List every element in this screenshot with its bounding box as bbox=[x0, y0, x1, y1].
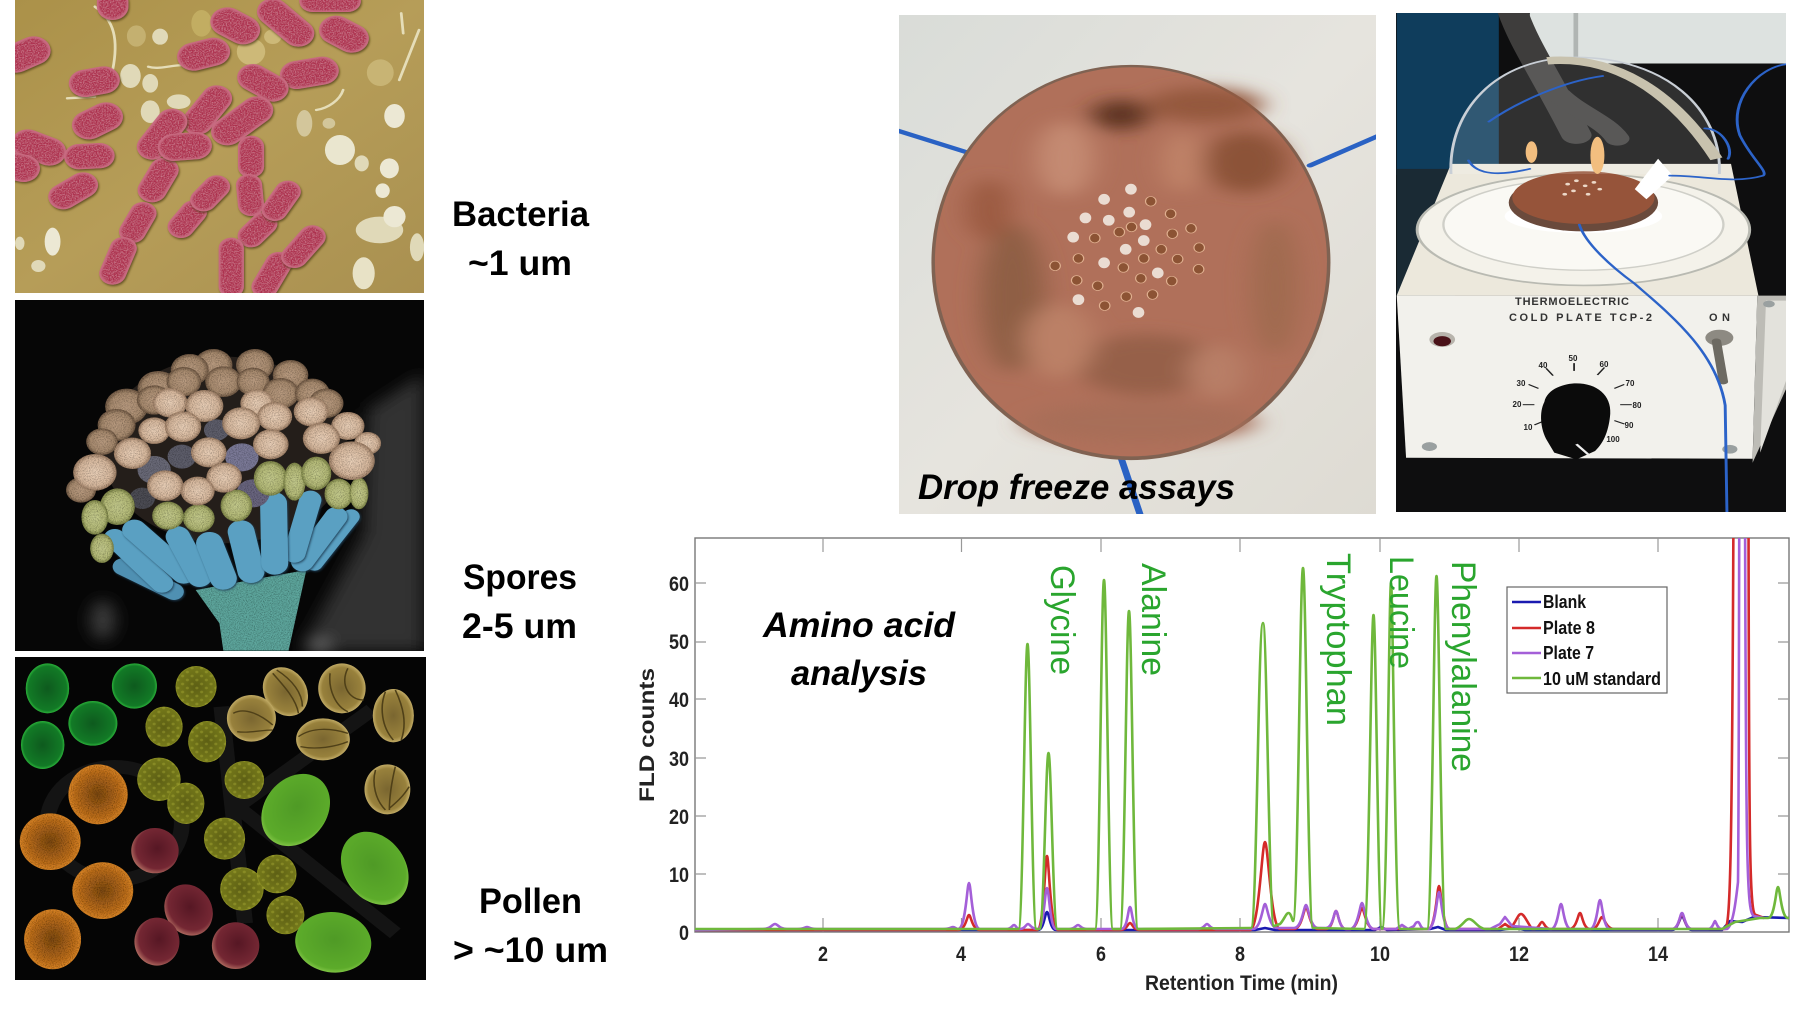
peak labels: Tryptophan bbox=[1319, 553, 1357, 726]
label: bacteria: ~1 um bbox=[468, 244, 572, 283]
panel: thermoelectric cold plate photo bbox=[1396, 10, 1792, 512]
dial knob bbox=[1541, 383, 1610, 459]
panel: pollen micrograph bbox=[15, 657, 426, 982]
panel lettering: THERMOELECTRIC bbox=[1515, 296, 1629, 308]
peak labels: Phenylalanine bbox=[1444, 561, 1482, 772]
x axis tick labels: 10 bbox=[1370, 943, 1390, 966]
label: spores: Spores bbox=[463, 558, 577, 597]
label: pollen: Pollen bbox=[479, 882, 582, 921]
panel lettering: 80 bbox=[1633, 401, 1642, 410]
peak labels: Glycine bbox=[1043, 565, 1081, 675]
panel lettering: 60 bbox=[1600, 360, 1609, 369]
y axis tick labels bbox=[669, 573, 689, 945]
panel lettering: 90 bbox=[1625, 421, 1634, 430]
chart annotation: amino acid analysis: Amino acid bbox=[762, 606, 956, 645]
label: spores bbox=[462, 558, 577, 646]
dial ticks bbox=[1523, 363, 1632, 425]
y axis tick labels: 30 bbox=[669, 748, 689, 771]
glass dome bbox=[1451, 57, 1719, 174]
x axis tick labels: 8 bbox=[1235, 943, 1245, 966]
panel: drop freeze assay copper plate photo bbox=[896, 15, 1380, 517]
panel: bacteria micrograph bbox=[15, 0, 424, 293]
photo background: wall and blue panel bbox=[1397, 13, 1792, 297]
legend: Plate 8 bbox=[1543, 618, 1595, 638]
peak labels: Leucine bbox=[1382, 556, 1420, 669]
screws bbox=[1422, 301, 1775, 454]
data lines bbox=[695, 500, 1790, 930]
panel lettering: COLD PLATE TCP-2 bbox=[1509, 312, 1652, 324]
y axis tick labels: 50 bbox=[669, 631, 689, 654]
panel lettering: 50 bbox=[1569, 354, 1578, 363]
label: pollen bbox=[453, 882, 608, 970]
front panel bbox=[1397, 296, 1757, 459]
legend: Blank bbox=[1543, 592, 1587, 612]
label: bacteria bbox=[452, 195, 590, 283]
x axis tick labels: 4 bbox=[956, 943, 966, 966]
y axis title: FLD counts bbox=[636, 668, 659, 802]
chart annotation: amino acid analysis bbox=[762, 606, 956, 693]
panel lettering: ON bbox=[1709, 312, 1730, 324]
y axis tick labels: 20 bbox=[669, 806, 689, 829]
panel lettering: 10 bbox=[1524, 423, 1533, 432]
panel lettering bbox=[1509, 296, 1730, 444]
panel lettering: 40 bbox=[1539, 361, 1548, 370]
legend bbox=[1507, 587, 1667, 693]
toggle switch bbox=[1705, 330, 1733, 382]
acrylic base flange bbox=[1417, 174, 1750, 285]
x axis tick labels: 14 bbox=[1648, 943, 1668, 966]
label: pollen: > ~10 um bbox=[453, 931, 608, 970]
y axis tick labels: 60 bbox=[669, 573, 689, 596]
label: bacteria: Bacteria bbox=[452, 195, 590, 234]
chart annotation: amino acid analysis: analysis bbox=[791, 654, 927, 693]
panel lettering: 100 bbox=[1606, 435, 1620, 444]
peak labels: Alanine bbox=[1134, 563, 1172, 676]
small copper plate bbox=[1509, 171, 1658, 231]
caption: drop freeze assays: Drop freeze assays bbox=[918, 468, 1235, 507]
x axis tick labels: 2 bbox=[818, 943, 828, 966]
blue thermocouple wire bbox=[1468, 64, 1786, 512]
panel lettering: 20 bbox=[1513, 400, 1522, 409]
x axis tick labels: 12 bbox=[1509, 943, 1529, 966]
y axis tick labels: 10 bbox=[669, 864, 689, 887]
panel lettering: 70 bbox=[1626, 379, 1635, 388]
legend: Plate 7 bbox=[1543, 643, 1594, 663]
cold plate box top bbox=[1397, 164, 1758, 296]
legend: 10 uM standard bbox=[1543, 669, 1661, 689]
indicator light bbox=[1429, 332, 1455, 347]
y axis tick labels: 0 bbox=[679, 922, 689, 945]
x axis title: Retention Time (min) bbox=[1145, 972, 1338, 995]
x axis tick labels: 6 bbox=[1096, 943, 1106, 966]
y axis tick labels: 40 bbox=[669, 689, 689, 712]
label: spores: 2-5 um bbox=[462, 607, 577, 646]
panel: fungal spores micrograph bbox=[15, 300, 424, 655]
peak labels bbox=[1043, 553, 1482, 772]
chart: amino acid chromatogram bbox=[636, 500, 1790, 995]
panel lettering: 30 bbox=[1517, 379, 1526, 388]
reflections of lights bbox=[1526, 137, 1604, 174]
x axis tick labels bbox=[818, 943, 1668, 966]
